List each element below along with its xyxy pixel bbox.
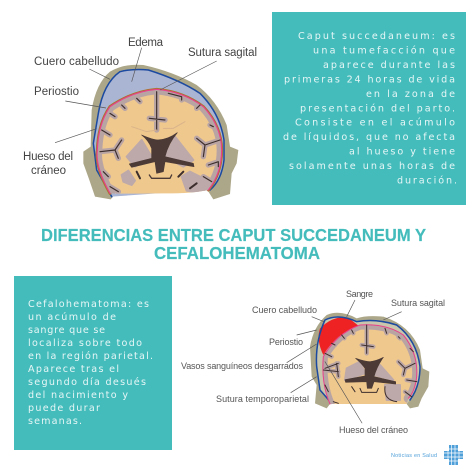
label: Hueso del cráneo: Hueso del [23, 151, 73, 163]
panel: caput succedaneum description: primeras 24 horas de vida [284, 74, 455, 86]
label: Sutura sagital: Sutura sagital [391, 298, 445, 308]
panel: cefalohematoma description: del nacimiento y [28, 390, 128, 401]
panel: cefalohematoma description: un acúmulo de [28, 311, 116, 323]
panel: cefalohematoma description: puede durar [28, 403, 100, 414]
icon: dotted blue cross [444, 445, 463, 465]
panel: caput succedaneum description: aparece durante las [323, 60, 455, 71]
panel: cefalohematoma description: sangre que se [28, 325, 105, 336]
panel: cefalohematoma description: Aparece tras el [28, 364, 119, 375]
logo: Noticias en Salud: Noticias en Salud [391, 453, 437, 459]
logo: Noticias en Salud [391, 445, 463, 465]
panel: cefalohematoma description: en la región parietal. [28, 350, 153, 362]
title: DIFERENCIAS ENTRE CAPUT SUCCEDANEUM Y [41, 225, 426, 245]
panel: caput succedaneum description: duración. [397, 174, 457, 186]
panel: caput succedaneum description: solamente unas horas de [289, 161, 455, 172]
label: Periostio: Periostio [269, 337, 303, 347]
panel: cefalohematoma description: semanas. [28, 416, 82, 427]
label: Cuero cabelludo: Cuero cabelludo [34, 56, 119, 68]
label: Periostio: Periostio [34, 86, 79, 98]
label: Sutura sagital: Sutura sagital [188, 47, 257, 59]
panel: caput succedaneum description: presentación del parto. [300, 102, 455, 114]
label: Vasos sanguíneos desgarrados: Vasos sanguíneos desgarrados [181, 361, 304, 371]
label: Cuero cabelludo: Cuero cabelludo [252, 305, 317, 315]
panel: caput succedaneum description: Caput succedaneum: es [298, 31, 455, 42]
label: Hueso del cráneo: cráneo [31, 165, 66, 177]
panel: cefalohematoma description: segundo día desués [28, 376, 146, 388]
label: Sutura temporoparietal: Sutura temporoparietal [216, 394, 309, 404]
panel: cefalohematoma description: localiza sobre todo [28, 338, 142, 349]
panel: caput succedaneum description: al hueso y tiene [349, 146, 455, 158]
label: Sangre: Sangre [346, 289, 373, 299]
panel: caput succedaneum description: en la zona de [366, 89, 455, 100]
label: Hueso del cráneo: Hueso del cráneo [339, 425, 408, 435]
panel: caput succedaneum description [272, 12, 466, 205]
label: Edema: Edema [128, 37, 164, 49]
panel: caput succedaneum description: una tumefacción que [313, 44, 455, 56]
panel: cefalohematoma description [14, 276, 172, 450]
panel: caput succedaneum description: de líquidos, que no afecta [283, 131, 455, 143]
panel: caput succedaneum description: Consiste en el acúmulo [295, 116, 455, 128]
diagram: caput succedaneum brain cross-section [23, 37, 257, 199]
title [41, 225, 426, 263]
panel: cefalohematoma description: Cefalohematoma: es [28, 299, 149, 310]
diagram: cefalohematoma brain cross-section [181, 289, 445, 435]
title: CEFALOHEMATOMA [154, 243, 320, 263]
